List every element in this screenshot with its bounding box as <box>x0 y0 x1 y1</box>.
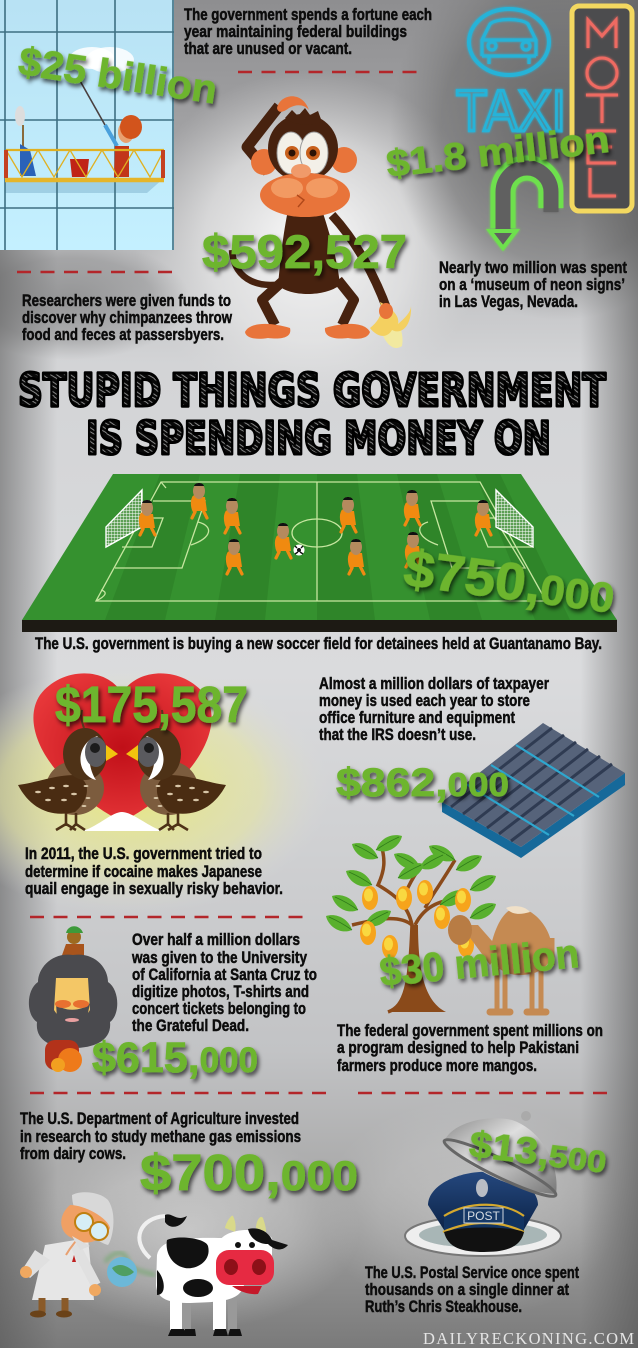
banana <box>370 302 411 348</box>
illustration: hippie <box>29 926 117 1072</box>
text: IRS: money is used each year to store <box>319 692 530 710</box>
horns <box>225 1216 266 1232</box>
players <box>140 483 491 574</box>
text: IRS: that the IRS doesn’t use. <box>319 726 476 744</box>
illustration: cow <box>139 1214 288 1336</box>
text: postal service: thousands on a single dinner at <box>365 1281 569 1299</box>
text: neon museum <box>439 259 627 311</box>
motel sign <box>572 6 632 211</box>
text: methane: from dairy cows. <box>20 1145 126 1163</box>
tail <box>232 250 290 285</box>
leaves <box>326 835 496 931</box>
text: methane: in research to study methane gas emissions <box>20 1128 301 1146</box>
postal cap: POST <box>467 1209 501 1223</box>
silver dome <box>440 1111 560 1203</box>
source credit: DAILYRECKONING.COM <box>423 1329 634 1348</box>
illustration: scientist <box>20 1192 155 1318</box>
plate <box>405 1216 561 1256</box>
text: postal service: Ruth’s Chris Steakhouse. <box>365 1298 522 1316</box>
text: quail <box>25 845 283 898</box>
illustration: monkey <box>232 96 411 348</box>
text: Grateful Dead: digitize photos, T-shirts and <box>132 983 309 1001</box>
right arm <box>332 215 388 312</box>
body <box>45 1040 82 1072</box>
head <box>218 1230 272 1270</box>
illustration: window washers <box>0 0 174 250</box>
text: federal buildings <box>184 6 432 58</box>
amount: 30 million: $30 million <box>377 930 581 995</box>
text: federal buildings: that are unused or vacant. <box>184 40 352 58</box>
gas <box>105 1253 155 1275</box>
amount: 13,500: $13,500 <box>467 1123 609 1181</box>
pole and mop <box>15 79 105 148</box>
goals <box>106 490 533 547</box>
text: mangos: farmers produce more mangos. <box>337 1057 537 1075</box>
tail <box>139 1214 187 1258</box>
text: quail: In 2011, the U.S. government tried to <box>25 845 262 863</box>
text: quail: quail engage in sexually risky behavior. <box>25 880 283 898</box>
amount: 25 billion: $25 billion <box>16 39 220 112</box>
text: IRS: Almost a million dollars of taxpayer <box>319 675 549 693</box>
small bear on head <box>61 926 84 958</box>
post badge <box>464 1208 503 1223</box>
illustration: soccer field <box>22 474 617 632</box>
legs <box>168 1295 242 1336</box>
amount: 615,000: $615,000 <box>92 1034 258 1082</box>
illustration: mango tree <box>326 835 496 1012</box>
text: quail: determine if cocaine makes Japanese <box>25 863 262 881</box>
text: Grateful Dead <box>131 931 317 1035</box>
text: methane: The U.S. Department of Agriculture invested <box>20 1110 299 1128</box>
snout <box>216 1250 274 1294</box>
glow behind quail <box>0 665 330 915</box>
amount: 862,000: $862, 000 <box>336 761 509 805</box>
text: Grateful Dead: the Grateful Dead. <box>132 1017 249 1035</box>
ball <box>294 544 304 556</box>
text: Grateful Dead: of California at Santa Cruz to <box>132 966 317 984</box>
spots <box>157 1238 213 1297</box>
hair <box>29 955 117 1048</box>
amount: 175,587: $175,587 <box>55 676 248 733</box>
amount: 592,527: $592,527 <box>202 225 407 278</box>
legs and feet <box>245 280 370 339</box>
illustration: camel <box>448 906 552 1012</box>
platform railing <box>5 150 164 180</box>
amount: 750,000: $750,000 <box>400 539 618 625</box>
illustration: warehouses <box>442 723 625 858</box>
globe <box>107 1257 137 1287</box>
right worker <box>105 115 142 177</box>
amount: 1.8 million: $1.8 million <box>384 119 612 186</box>
text: postal service: The U.S. Postal Service once spent <box>365 1264 579 1282</box>
text: chimpanzees: food and feces at passersbyers. <box>22 326 224 344</box>
raised arm <box>247 96 309 172</box>
amount: 700,000: $700, 000 <box>140 1144 358 1201</box>
text: chimpanzees: discover why chimpanzees throw <box>22 309 232 327</box>
postal cap <box>428 1172 538 1252</box>
torso <box>278 210 340 294</box>
text: IRS: office furniture and equipment <box>319 709 515 727</box>
text: chimpanzees: Researchers were given funds to <box>22 292 231 310</box>
text: methane <box>20 1110 301 1163</box>
text: chimpanzees <box>22 292 232 344</box>
text: IRS <box>319 675 549 744</box>
taxi neon word: TAXI <box>456 79 566 144</box>
head <box>268 114 338 182</box>
eyes <box>277 132 328 174</box>
text: postal service <box>365 1264 579 1316</box>
text: federal buildings: year maintaining federal buildings <box>184 23 407 41</box>
face <box>54 978 90 1024</box>
body <box>156 1238 244 1303</box>
title <box>18 364 606 465</box>
left worker <box>20 144 36 176</box>
illustration: neon signs <box>456 6 632 248</box>
text: neon museum: in Las Vegas, Nevada. <box>439 293 578 311</box>
text: mangos <box>337 1022 603 1075</box>
text: federal buildings: The government spends a fortune each <box>184 6 432 24</box>
text: Grateful Dead: was given to the University <box>131 949 308 967</box>
text: Grateful Dead: Over half a million dollars <box>132 931 300 949</box>
taxi car icon <box>469 9 549 75</box>
illustration: post cap and dome <box>405 1111 561 1256</box>
muzzle <box>260 164 350 217</box>
text: Grateful Dead: concert tickets belonging to <box>132 1000 306 1018</box>
bucket <box>70 159 89 177</box>
mangoes <box>360 880 474 959</box>
u-turn arrow <box>490 168 551 248</box>
illustration: quail and heart <box>18 673 226 831</box>
ears <box>251 147 357 175</box>
text: mangos: a program designed to help Pakistani <box>337 1039 579 1057</box>
